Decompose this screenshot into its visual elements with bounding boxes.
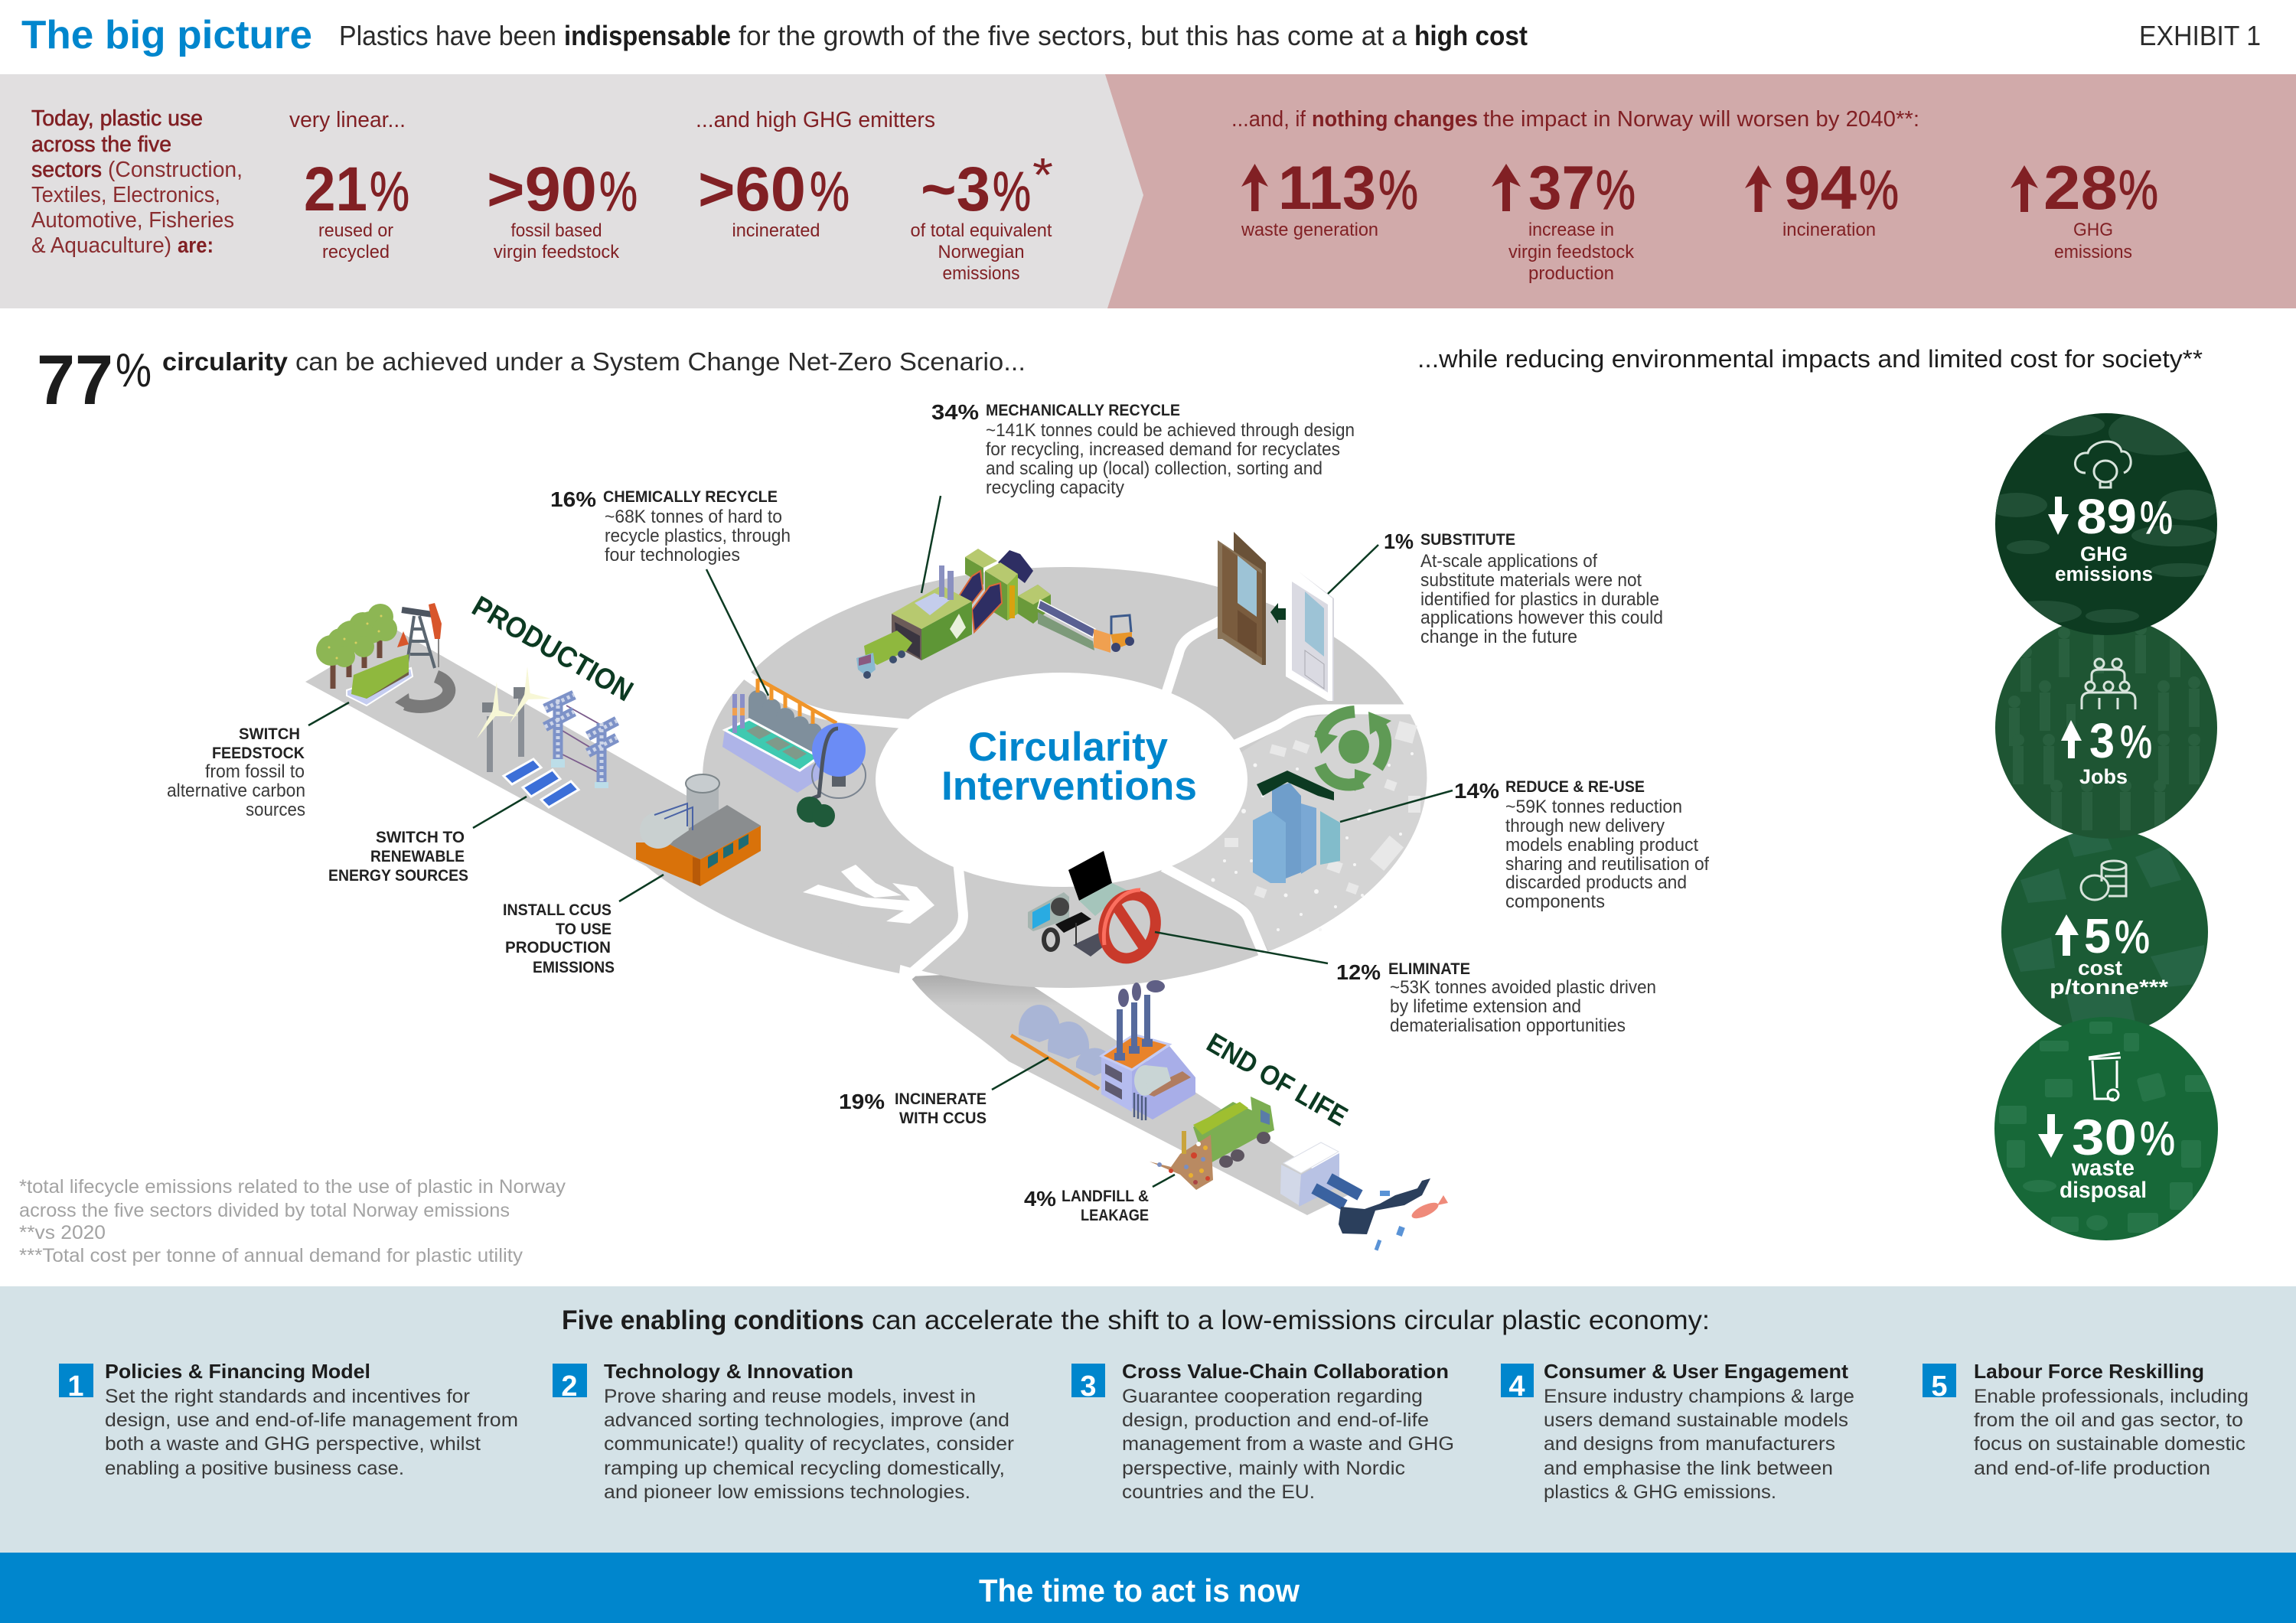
silos	[748, 690, 822, 759]
condition 2: Technology & Innovation	[604, 1360, 853, 1383]
heading: Five enabling conditions	[562, 1305, 864, 1335]
callout: mechanically recycle: MECHANICALLY RECYCLE	[986, 402, 1180, 419]
panel: enabling conditions	[0, 1286, 2296, 1553]
footer banner	[0, 1553, 2296, 1623]
stat: 90%: virgin feedstock	[494, 242, 620, 262]
circle: ghg emissions: emissions	[2055, 562, 2153, 585]
callout: substitute: At-scale applications of	[1420, 551, 1597, 572]
forklift	[1094, 615, 1134, 653]
stat: 3%: *	[1032, 149, 1053, 202]
condition 3: perspective, mainly with Nordic	[1122, 1458, 1405, 1479]
callout: eliminate: ~53K tonnes avoided plastic driven	[1390, 977, 1656, 998]
circle: ghg emissions	[1986, 409, 2219, 635]
heading: if nothing changes	[1231, 107, 1919, 132]
circle: cost per tonne: cost	[2078, 957, 2122, 979]
coal conveyors	[954, 571, 983, 612]
condition 1: 1	[67, 1370, 84, 1403]
intro text: & Aquaculture)	[31, 233, 171, 258]
callout: chemically recycle: ~68K tonnes of hard to	[605, 507, 782, 527]
chimneys and smoke	[1114, 995, 1153, 1061]
callout: mechanically recycle: 34%	[931, 400, 979, 424]
condition 4: Ensure industry champions & large	[1544, 1386, 1854, 1407]
icon: chemical plant	[722, 679, 866, 827]
chevron	[1257, 771, 1334, 800]
brown door	[1218, 532, 1266, 665]
phone and watch	[1055, 912, 1091, 933]
callout: switch feedstock: from fossil to	[205, 761, 305, 782]
circle: waste disposal: disposal	[2060, 1178, 2147, 1203]
stat: 21%: recycled	[322, 242, 390, 262]
callout: substitute	[1328, 530, 1663, 647]
intro text: Automotive, Fisheries	[31, 208, 234, 233]
circle: jobs: Jobs	[2079, 765, 2128, 788]
stat: 94%: %	[1859, 160, 1899, 221]
callout: eliminate: 12%	[1336, 960, 1381, 984]
footnotes	[19, 1176, 566, 1266]
callout: reduce and re-use: models enabling product	[1505, 835, 1698, 855]
condition 4	[1501, 1360, 1854, 1503]
sorting towers	[965, 549, 1018, 621]
callout: reduce and re-use: discarded products and	[1505, 872, 1687, 893]
circle: cost per tonne: p/tonne***	[2050, 976, 2169, 999]
icon: bin	[2089, 1053, 2121, 1100]
cylinder	[640, 812, 677, 849]
icon: incinerator	[1011, 980, 1195, 1120]
stat: 28%: emissions	[2054, 242, 2132, 262]
circle: cost per tonne	[2001, 829, 2208, 1035]
radio	[1028, 892, 1069, 931]
recycle arrows	[1320, 712, 1385, 785]
circle: cost per tonne: 5	[2084, 908, 2111, 963]
stat: 60%: >60	[698, 155, 806, 224]
icon: reduce and re-use	[1253, 712, 1391, 883]
condition 4: Consumer & User Engagement	[1544, 1360, 1848, 1383]
circularity headline: %	[116, 344, 152, 397]
heading: if nothing changes: nothing changes	[1312, 107, 1478, 132]
base	[722, 730, 821, 793]
callout: renewable energy: RENEWABLE	[370, 848, 465, 865]
stat: 3%: of total equivalent	[911, 220, 1052, 241]
stat: 28%: GHG	[2073, 220, 2113, 240]
callout: switch feedstock: SWITCH	[239, 725, 300, 743]
stat: 21%: %	[370, 161, 409, 223]
condition 5: focus on sustainable domestic	[1974, 1433, 2245, 1455]
callout: substitute: 1%	[1384, 530, 1414, 553]
sphere	[812, 752, 866, 798]
label: end of life: END OF LIFE	[1202, 1026, 1353, 1132]
icon: feedstock trees and pump jack	[316, 603, 449, 712]
callout: mechanically recycle: ~141K tonnes could be achieved through design	[986, 420, 1355, 441]
stat: 113%	[1241, 154, 1418, 240]
condition 5: Enable professionals, including	[1974, 1386, 2249, 1407]
icon: pylons	[545, 695, 617, 788]
ring	[703, 567, 1427, 988]
fish	[1410, 1195, 1448, 1221]
callout: landfill: LANDFILL &	[1062, 1188, 1149, 1205]
condition 2: 2	[561, 1370, 578, 1403]
circularity headline: 77	[37, 341, 113, 419]
callout: substitute: change in the future	[1420, 627, 1577, 647]
callout: switch feedstock: sources	[246, 800, 305, 820]
callout: landfill: LEAKAGE	[1081, 1207, 1149, 1224]
callout: incinerate: WITH CCUS	[899, 1110, 987, 1127]
icon: solar panels	[504, 759, 579, 807]
stat: 3%: ~3	[921, 155, 990, 224]
callout: substitute: substitute materials were not	[1420, 570, 1642, 591]
circularity headline: can be achieved under a System Change Net-Zero Scenario...	[295, 347, 1026, 376]
white door	[1286, 572, 1334, 701]
callout: eliminate	[1155, 932, 1656, 1036]
tank	[686, 774, 719, 829]
condition 5: from the oil and gas sector, to	[1974, 1410, 2243, 1431]
condition 4: and designs from manufacturers	[1544, 1433, 1835, 1455]
callout: incinerate: INCINERATE	[895, 1090, 987, 1108]
callout: install ccus: TO USE	[556, 921, 612, 938]
heading: can accelerate the shift to a low-emissions circular plastic economy:	[872, 1305, 1710, 1335]
callout: install ccus: INSTALL CCUS	[503, 901, 612, 919]
footnotes: ***Total cost per tonne of annual demand for plastic utility	[19, 1245, 523, 1266]
circle: jobs: %	[2120, 716, 2152, 768]
stat: 90%: %	[599, 161, 638, 223]
callout: eliminate: ELIMINATE	[1388, 960, 1470, 978]
stat: 21%: 21	[304, 155, 367, 224]
callout: substitute: SUBSTITUTE	[1420, 531, 1515, 549]
callout: switch feedstock: FEEDSTOCK	[212, 745, 305, 762]
title: The big picture	[21, 13, 312, 57]
icon: garbage truck and landfill	[1150, 1097, 1274, 1190]
condition 3: design, production and end-of-life	[1122, 1410, 1429, 1431]
oil	[1339, 1178, 1430, 1234]
condition 1: both a waste and GHG perspective, whilst	[105, 1433, 481, 1455]
callout: landfill	[1024, 1175, 1175, 1224]
icon: eliminate devices	[1028, 851, 1163, 964]
condition 1: design, use and end-of-life management from	[105, 1410, 518, 1431]
intro text: Textiles, Electronics,	[31, 183, 220, 207]
icon: doors	[1218, 532, 1334, 701]
production road	[305, 629, 911, 973]
subtitle	[339, 20, 1528, 51]
condition 5	[1923, 1360, 2249, 1479]
trees	[316, 604, 397, 689]
icon: people	[2082, 659, 2135, 709]
stat: 28%: %	[2118, 160, 2158, 221]
reduce segment texture	[1171, 715, 1427, 951]
icon: wind turbines	[477, 666, 551, 772]
footer banner: The time to act is now	[979, 1572, 1300, 1608]
callout: reduce and re-use: sharing and reutilisation of	[1505, 854, 1709, 875]
stat: 113%: %	[1378, 160, 1418, 221]
circularity headline: circularity	[162, 347, 289, 376]
callout: reduce and re-use: components	[1505, 891, 1605, 912]
circle: waste disposal	[1994, 1017, 2218, 1240]
end of life road	[910, 972, 1351, 1215]
tanks	[797, 797, 835, 827]
stat: 113%: waste generation	[1241, 220, 1378, 240]
white centre	[876, 673, 1247, 887]
stat: 28%	[2011, 154, 2158, 262]
router	[1073, 923, 1114, 957]
condition 5: 5	[1931, 1370, 1948, 1403]
pump jack	[397, 603, 442, 668]
callout: renewable energy	[328, 797, 527, 885]
footnotes: across the five sectors divided by total Norway emissions	[19, 1200, 510, 1221]
stat: 90%: fossil based	[511, 220, 602, 241]
intro text	[31, 106, 243, 258]
condition 2: ramping up chemical recycling domestically,	[604, 1458, 1005, 1479]
callout: reduce and re-use: REDUCE & RE-USE	[1505, 778, 1645, 796]
heading: if nothing changes: ...and, if	[1231, 107, 1306, 132]
icon: outfall and oil leak	[1280, 1142, 1448, 1251]
truck	[864, 631, 912, 665]
callout: eliminate: dematerialisation opportunities	[1390, 1015, 1626, 1036]
callout: reduce and re-use: ~59K tonnes reduction	[1505, 797, 1682, 817]
header	[21, 13, 2261, 57]
stat: 94%: 94	[1784, 154, 1857, 223]
icon: ccus factory	[636, 774, 761, 886]
intro text: across the five	[31, 132, 171, 157]
footnotes: *total lifecycle emissions related to the use of plastic in Norway	[19, 1176, 566, 1198]
callout: eliminate: by lifetime extension and	[1390, 996, 1581, 1017]
callout: incinerate	[839, 1058, 1049, 1127]
callout: mechanically recycle: for recycling, increased demand for recyclates	[986, 439, 1340, 460]
stat: 90%	[487, 155, 638, 262]
circle: ghg emissions: 89	[2076, 489, 2137, 544]
exhibit label: EXHIBIT 1	[2139, 20, 2261, 51]
stat: 37%: %	[1596, 160, 1636, 221]
condition 4: users demand sustainable models	[1544, 1410, 1848, 1431]
condition 5: and end-of-life production	[1974, 1458, 2210, 1479]
callout: mechanically recycle	[921, 400, 1355, 593]
heading: high GHG emitters: ...and high GHG emitters	[696, 108, 935, 132]
subtitle: indispensable	[564, 20, 731, 51]
intro text: sectors	[31, 158, 102, 182]
icon: recycling plant	[856, 549, 1134, 679]
centre title: Interventions	[941, 764, 1197, 809]
litter pile	[1150, 1135, 1213, 1190]
circle: jobs: 3	[2089, 713, 2115, 768]
stat: 37%: 37	[1528, 154, 1595, 223]
callout: substitute: applications however this could	[1420, 608, 1663, 628]
sorter	[1018, 585, 1051, 624]
stat: 60%: incinerated	[732, 220, 820, 241]
arrow	[1270, 603, 1286, 624]
stat: 3%: Norwegian	[938, 242, 1024, 262]
stat: 94%	[1745, 154, 1899, 240]
condition 1: enabling a positive business case.	[105, 1458, 404, 1479]
callout: substitute: identified for plastics in durable	[1420, 589, 1659, 610]
callout: chemically recycle: CHEMICALLY RECYCLE	[603, 488, 778, 506]
subtitle: high cost	[1414, 20, 1528, 51]
stat: 60%	[698, 155, 850, 241]
condition 3: management from a waste and GHG	[1122, 1433, 1454, 1455]
prohibition sign	[1097, 889, 1163, 964]
stacks	[732, 694, 745, 733]
stat: 3%: %	[993, 161, 1031, 223]
condition 3: Guarantee cooperation regarding	[1122, 1386, 1423, 1407]
callout: chemically recycle: four technologies	[605, 545, 740, 565]
circular arrow	[395, 676, 449, 712]
callout: install ccus	[503, 875, 664, 976]
condition 4: 4	[1508, 1370, 1525, 1403]
stat: 37%: virgin feedstock	[1508, 242, 1635, 262]
callout: renewable energy: SWITCH TO	[376, 829, 465, 846]
label: production: PRODUCTION	[467, 590, 638, 708]
callout: reduce and re-use: 14%	[1454, 779, 1499, 803]
intro text: Today, plastic use	[31, 106, 203, 131]
top coal	[998, 550, 1033, 583]
circle: jobs	[1995, 617, 2217, 839]
condition 2: advanced sorting technologies, improve (and	[604, 1410, 1009, 1431]
bars	[1253, 783, 1340, 883]
panel: 2040 band	[1105, 74, 2296, 308]
laptop	[1068, 851, 1127, 916]
callout: reduce and re-use: through new delivery	[1505, 816, 1665, 836]
circularity diagram base	[305, 567, 1427, 1215]
condition 1	[59, 1360, 518, 1479]
circle: waste disposal: 30	[2072, 1109, 2137, 1165]
condition 5: Labour Force Reskilling	[1974, 1360, 2204, 1383]
condition 3: countries and the EU.	[1122, 1481, 1315, 1503]
centre title: Circularity	[968, 725, 1169, 770]
heading: if nothing changes: the impact in Norway will worsen by 2040**:	[1483, 107, 1919, 132]
stat: 37%: increase in	[1528, 220, 1614, 240]
stat: 21%	[304, 155, 409, 262]
icon: coins	[2081, 861, 2126, 900]
planter	[347, 654, 413, 706]
callout: switch feedstock	[167, 702, 349, 820]
stat: 37%: production	[1528, 263, 1614, 284]
domes	[1019, 1005, 1114, 1076]
bottles	[1375, 1191, 1405, 1251]
callout: incinerate: 19%	[839, 1090, 885, 1113]
intro text: are:	[178, 233, 214, 258]
condition 4: plastics & GHG emissions.	[1544, 1481, 1776, 1503]
stat: 94%: incineration	[1782, 220, 1876, 240]
callout: mechanically recycle: and scaling up (local) collection, sorting and	[986, 458, 1322, 479]
condition 1: Policies & Financing Model	[105, 1360, 370, 1383]
stat: 28%: 28	[2043, 154, 2118, 223]
circle: cost per tonne: %	[2115, 911, 2150, 963]
heading: very linear: very linear...	[289, 108, 406, 132]
condition 3	[1071, 1360, 1454, 1503]
condition 2: communicate!) quality of recyclates, consider	[604, 1433, 1014, 1455]
callout: install ccus: PRODUCTION	[505, 939, 611, 957]
callout: chemically recycle: 16%	[550, 487, 596, 511]
subtitle: Plastics have been	[339, 20, 556, 51]
condition 3: Cross Value-Chain Collaboration	[1122, 1360, 1449, 1383]
circle: ghg emissions: %	[2140, 492, 2173, 543]
callout: switch feedstock: alternative carbon	[167, 781, 305, 801]
stat: 37%	[1492, 154, 1636, 284]
stat: 60%: %	[810, 161, 850, 223]
building	[892, 614, 921, 660]
stat: 21%: reused or	[318, 220, 393, 241]
condition 4: and emphasise the link between	[1544, 1458, 1833, 1479]
building	[1101, 1056, 1132, 1112]
callout: renewable energy: ENERGY SOURCES	[328, 867, 468, 885]
callout: chemically recycle	[550, 487, 791, 696]
stat: 90%: >90	[487, 155, 597, 224]
condition 3: 3	[1080, 1370, 1097, 1403]
condition 1: Set the right standards and incentives for	[105, 1386, 470, 1407]
intro text: (Construction,	[108, 158, 243, 182]
callout: reduce and re-use	[1340, 778, 1709, 912]
panel: today band	[0, 74, 2296, 308]
stat: 3%	[911, 149, 1053, 284]
icon: cloud and skull	[2075, 442, 2131, 487]
footnotes: **vs 2020	[19, 1222, 106, 1243]
flow arrow	[803, 865, 934, 924]
subtitle: for the growth of the five sectors, but this has come at a	[739, 20, 1407, 51]
condition 2: Prove sharing and reuse models, invest in	[604, 1386, 976, 1407]
segment gaps	[746, 618, 1420, 986]
circle: waste disposal: waste	[2071, 1155, 2135, 1181]
conveyor	[1038, 612, 1094, 650]
callout: landfill: 4%	[1024, 1187, 1056, 1211]
condition 2	[553, 1360, 1014, 1503]
callout: mechanically recycle: recycling capacity	[986, 477, 1124, 498]
pipes	[758, 679, 837, 724]
callout: install ccus: EMISSIONS	[533, 959, 615, 976]
circle: ghg emissions: GHG	[2080, 543, 2128, 565]
circle: waste disposal: %	[2140, 1113, 2175, 1165]
condition 2: and pioneer low emissions technologies.	[604, 1481, 970, 1503]
stat: 113%: 113	[1278, 154, 1376, 223]
impacts headline: ...while reducing environmental impacts and limited cost for society**	[1417, 345, 2203, 373]
circularity headline	[37, 341, 1026, 419]
centre title	[941, 725, 1197, 809]
callout: chemically recycle: recycle plastics, through	[605, 526, 791, 546]
stat: 3%: emissions	[943, 263, 1019, 284]
